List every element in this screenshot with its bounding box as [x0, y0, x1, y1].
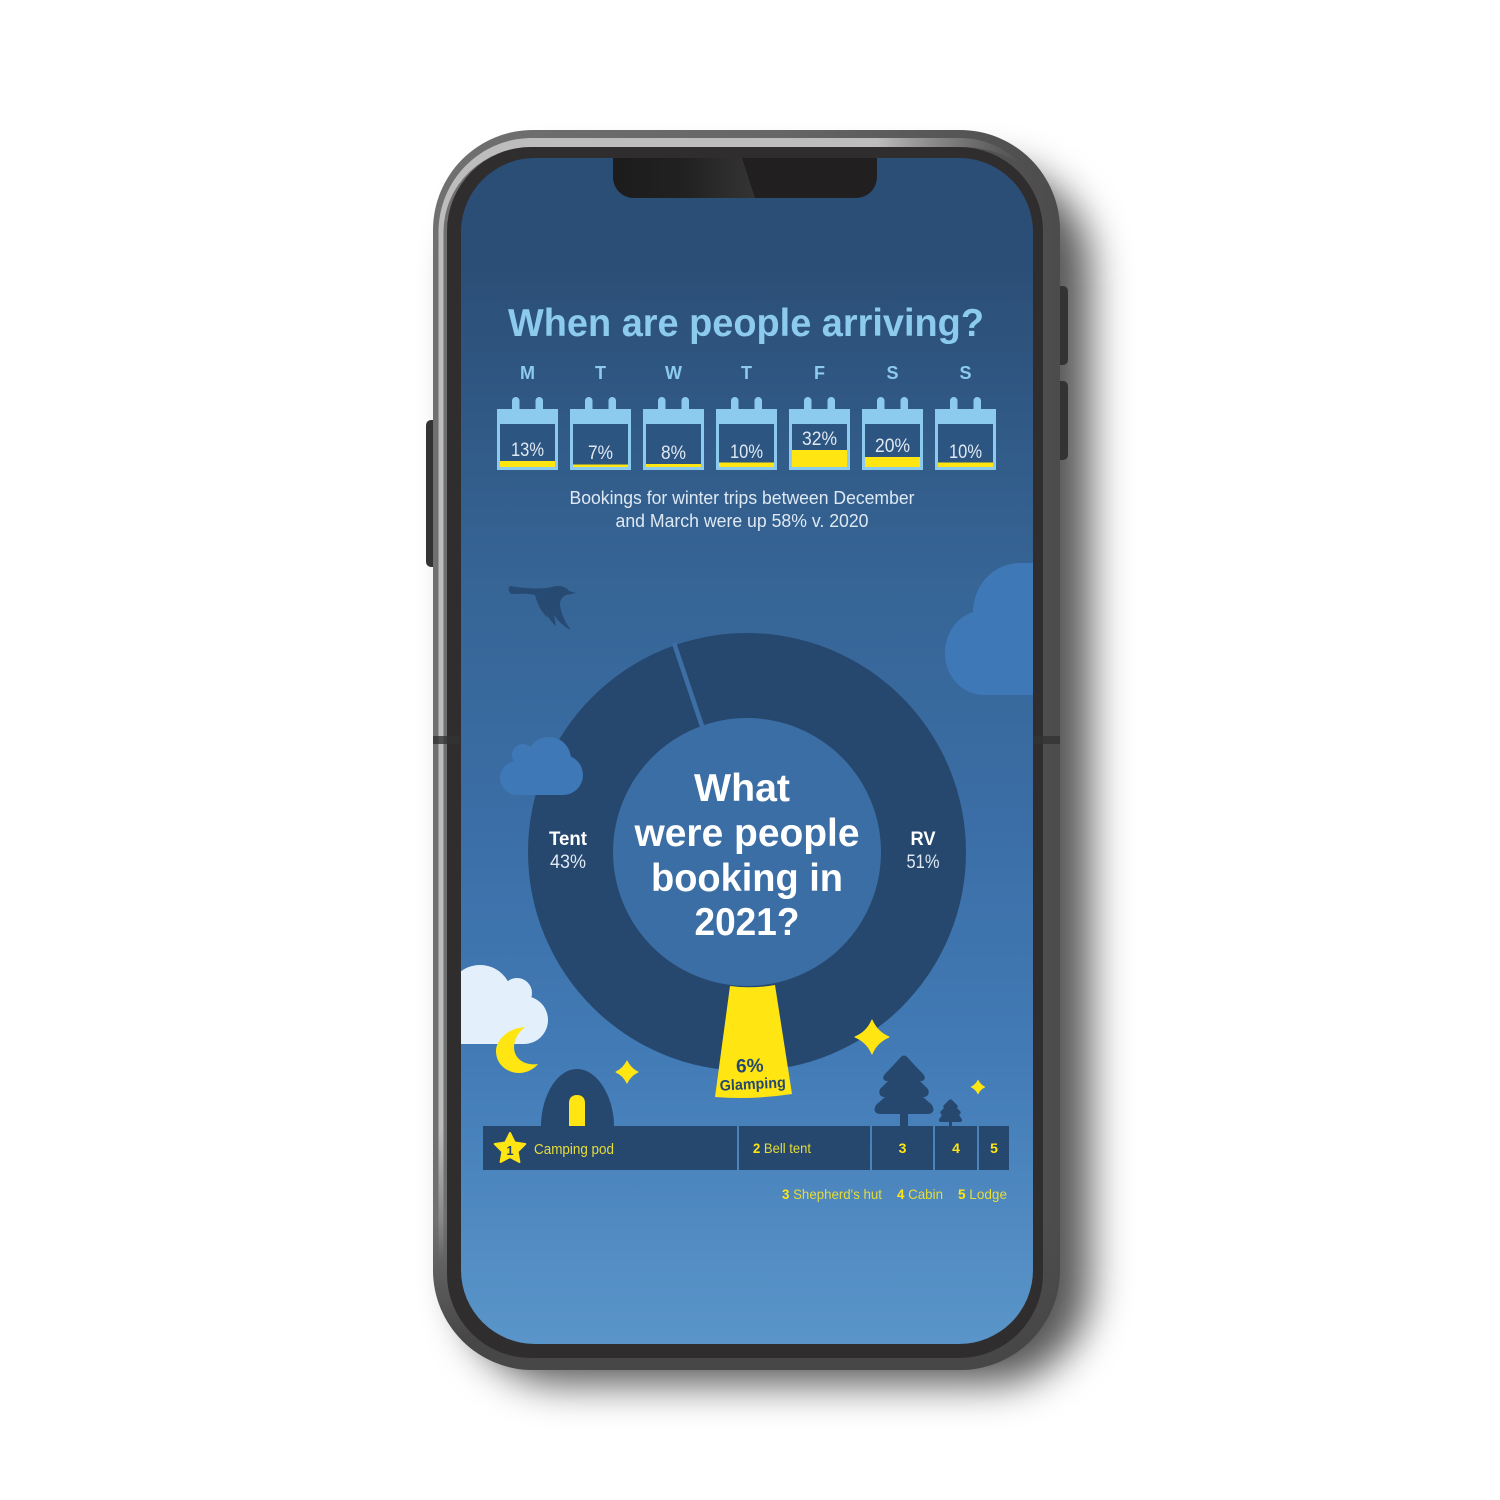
- calendar: Monday: [497, 363, 558, 470]
- calendar: Friday: [789, 363, 850, 470]
- title: When are people arriving?: [508, 302, 984, 345]
- weekly calendars: [497, 363, 996, 470]
- cloud: over donut: [500, 737, 583, 795]
- bird silhouette: [509, 586, 576, 630]
- calendar: Tuesday: 7%: [588, 443, 613, 464]
- centre heading: What: [694, 767, 790, 810]
- centre heading: 2021?: [694, 901, 800, 944]
- bar legend: [782, 1189, 1006, 1202]
- icon: sparkle small: [971, 1080, 985, 1094]
- segment label: RV: [907, 832, 939, 868]
- screen: [448, 158, 1040, 1344]
- notch: [613, 158, 877, 198]
- calendar: Sunday: [935, 363, 996, 470]
- glamping segment: [715, 985, 792, 1098]
- icon: sparkle left: [616, 1061, 638, 1083]
- bar segment 1: camping pod: [483, 1126, 737, 1170]
- phone drop shadow: [462, 168, 1090, 1384]
- icon: star: [495, 1133, 525, 1162]
- calendar: Monday: M: [520, 363, 535, 383]
- metal frame: [433, 130, 1060, 1370]
- bar segment 2: bell tent: [739, 1126, 870, 1170]
- donut chart: [528, 633, 966, 1071]
- bar segment 5: [979, 1126, 1009, 1170]
- calendar: Wednesday: [643, 363, 704, 470]
- calendar: Sunday: 10%: [949, 442, 982, 463]
- donut centre: [613, 718, 881, 986]
- calendar: Thursday: [716, 363, 777, 470]
- segment label: Tent: Tent: [549, 829, 588, 850]
- calendar: Saturday: 20%: [875, 436, 910, 457]
- caption text: and March were up 58% v. 2020: [616, 510, 868, 531]
- calendar: Saturday: [862, 363, 923, 470]
- calendar: Friday: 32%: [802, 429, 837, 450]
- bar segment 4: 4: [952, 1140, 960, 1156]
- calendar: Thursday: 10%: [730, 442, 763, 463]
- bar: ranked accommodation: [483, 1126, 1009, 1170]
- segment label: Tent: [549, 832, 587, 868]
- glamping segment: 6%: [736, 1056, 764, 1077]
- segment label: RV: 51%: [906, 852, 940, 873]
- cloud: top right: [945, 563, 1040, 695]
- cloud: white: [461, 965, 548, 1044]
- bar legend: 3 Shepherd's hut: [782, 1186, 882, 1202]
- bar legend: 5 Lodge: [958, 1186, 1007, 1202]
- bar segment 3: [872, 1126, 933, 1170]
- calendar: Wednesday: W: [665, 363, 682, 383]
- segment label: RV: RV: [910, 829, 936, 850]
- icon: small tree: [939, 1099, 962, 1126]
- bar segment 1: camping pod: 1: [506, 1143, 514, 1158]
- bar segment 5: 5: [990, 1140, 998, 1156]
- calendar: Friday: F: [814, 363, 825, 383]
- bar segment 1: camping pod: Camping pod: [534, 1142, 614, 1158]
- bar segment 2: bell tent: 2 Bell tent: [753, 1140, 811, 1156]
- side buttons: [426, 286, 1068, 567]
- caption text: Bookings for winter trips between December: [570, 487, 914, 508]
- calendar: Saturday: S: [886, 363, 899, 383]
- centre heading: were people: [634, 812, 860, 855]
- segment divider: [674, 643, 702, 726]
- icon: sparkle large: [855, 1020, 889, 1054]
- calendar: Tuesday: T: [595, 363, 606, 383]
- icon: camping pod: [541, 1069, 614, 1126]
- calendar: Monday: 13%: [511, 440, 544, 461]
- centre heading: booking in: [651, 857, 843, 900]
- phone body: [426, 130, 1068, 1370]
- segment label: Tent: 43%: [550, 852, 586, 873]
- calendar: Wednesday: 8%: [661, 443, 686, 464]
- icon: large tree: [875, 1056, 933, 1126]
- antenna bands: [433, 736, 460, 744]
- calendar: Tuesday: [570, 363, 631, 470]
- icon: crescent moon: [496, 1027, 538, 1073]
- caption text: [570, 487, 914, 531]
- calendar: Sunday: S: [959, 363, 972, 383]
- bar legend: 4 Cabin: [897, 1186, 943, 1202]
- calendar: Thursday: T: [741, 363, 752, 383]
- bar segment 3: 3: [899, 1140, 907, 1156]
- centre heading: [634, 767, 860, 944]
- bar segment 4: [935, 1126, 977, 1170]
- glamping segment: Glamping: [719, 1074, 786, 1095]
